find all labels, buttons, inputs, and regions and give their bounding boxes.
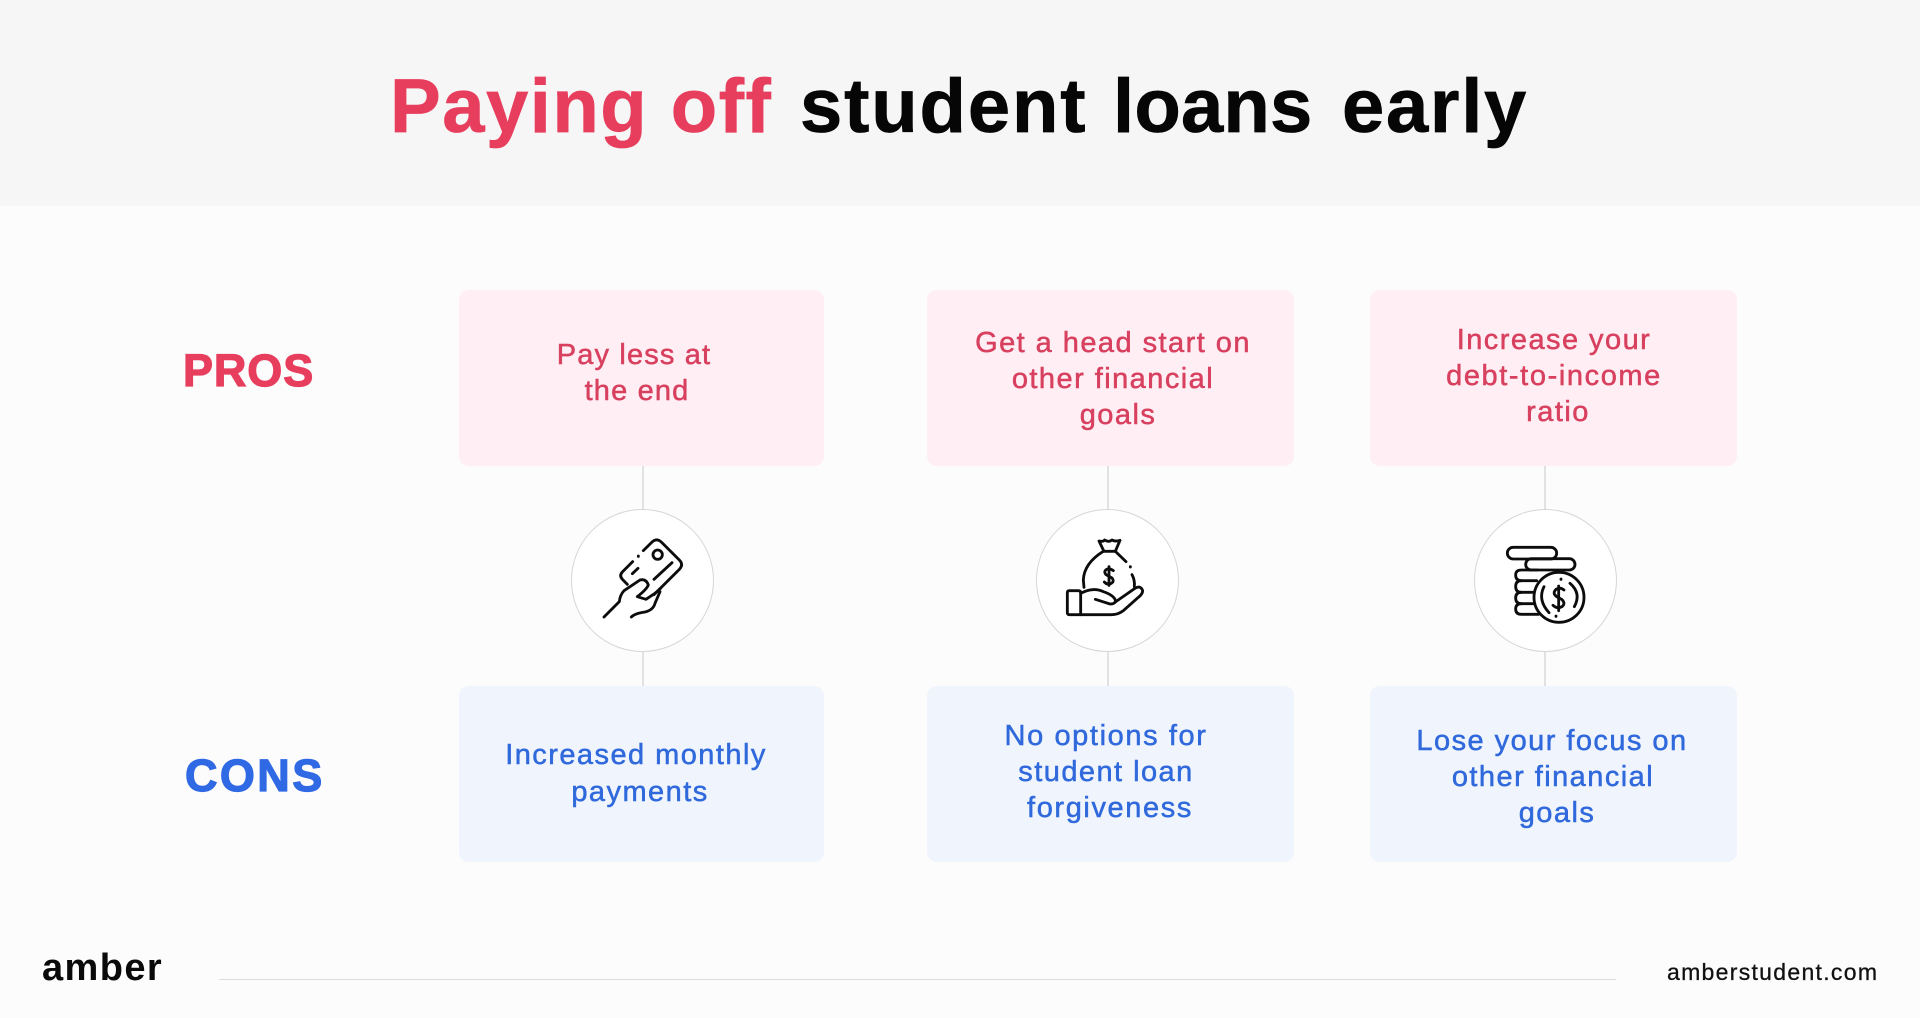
- pro card 2 text: goals: [1080, 399, 1156, 431]
- con card 2: [927, 686, 1294, 862]
- title: loans: [1113, 64, 1312, 149]
- pro card 3: [1370, 290, 1737, 466]
- con card 3: [1370, 686, 1737, 862]
- title: early: [1342, 64, 1528, 149]
- pro card 2: [927, 290, 1294, 466]
- icon: coin stack: [1506, 546, 1586, 624]
- con card 3 text: [1416, 725, 1688, 829]
- pro card 3 text: ratio: [1526, 396, 1590, 428]
- con card 2 text: student loan: [1018, 756, 1194, 788]
- con card 3 text: Lose your focus on: [1416, 725, 1688, 757]
- title: Paying off: [390, 64, 772, 149]
- con card 1 text: [505, 739, 767, 808]
- pro card 3 text: [1446, 324, 1662, 428]
- pro card 1: [459, 290, 824, 466]
- label: pros: PROS: [183, 345, 314, 396]
- icon circle 3: coin stack: [1474, 509, 1617, 652]
- title: student: [800, 64, 1087, 149]
- pro card 2 text: [975, 327, 1251, 431]
- icon: hand holding money bag: [1066, 538, 1144, 616]
- connector: column 3: [1544, 465, 1546, 687]
- con card 3 text: other financial: [1452, 761, 1654, 793]
- con card 1 text: Increased monthly: [505, 739, 767, 771]
- website url: amberstudent.com: [1667, 959, 1878, 985]
- pro card 2 text: other financial: [1012, 363, 1214, 395]
- con card 3 text: goals: [1519, 797, 1595, 829]
- connector: column 2: [1107, 465, 1109, 687]
- icon: hand holding card: [602, 538, 684, 618]
- con card 1 text: payments: [571, 776, 709, 808]
- pro card 2 text: Get a head start on: [975, 327, 1251, 359]
- connector: column 1: [642, 465, 644, 687]
- con card 2 text: [1005, 720, 1207, 824]
- header band: [0, 0, 1920, 206]
- pro card 3 text: debt-to-income: [1446, 360, 1662, 392]
- con card 1: [459, 686, 824, 862]
- logo: amber: amber: [42, 947, 163, 989]
- pro card 1 text: [557, 339, 711, 407]
- pro card 1 text: Pay less at: [557, 339, 711, 371]
- con card 2 text: forgiveness: [1027, 792, 1193, 824]
- title: [390, 64, 1528, 149]
- icon circle 1: hand holding card: [571, 509, 714, 652]
- pro card 3 text: Increase your: [1457, 324, 1651, 356]
- pro card 1 text: the end: [585, 375, 689, 407]
- con card 2 text: No options for: [1005, 720, 1207, 752]
- label: cons: CONS: [185, 750, 325, 801]
- icon circle 2: hand holding money bag: [1036, 509, 1179, 652]
- footer rule: [219, 979, 1616, 980]
